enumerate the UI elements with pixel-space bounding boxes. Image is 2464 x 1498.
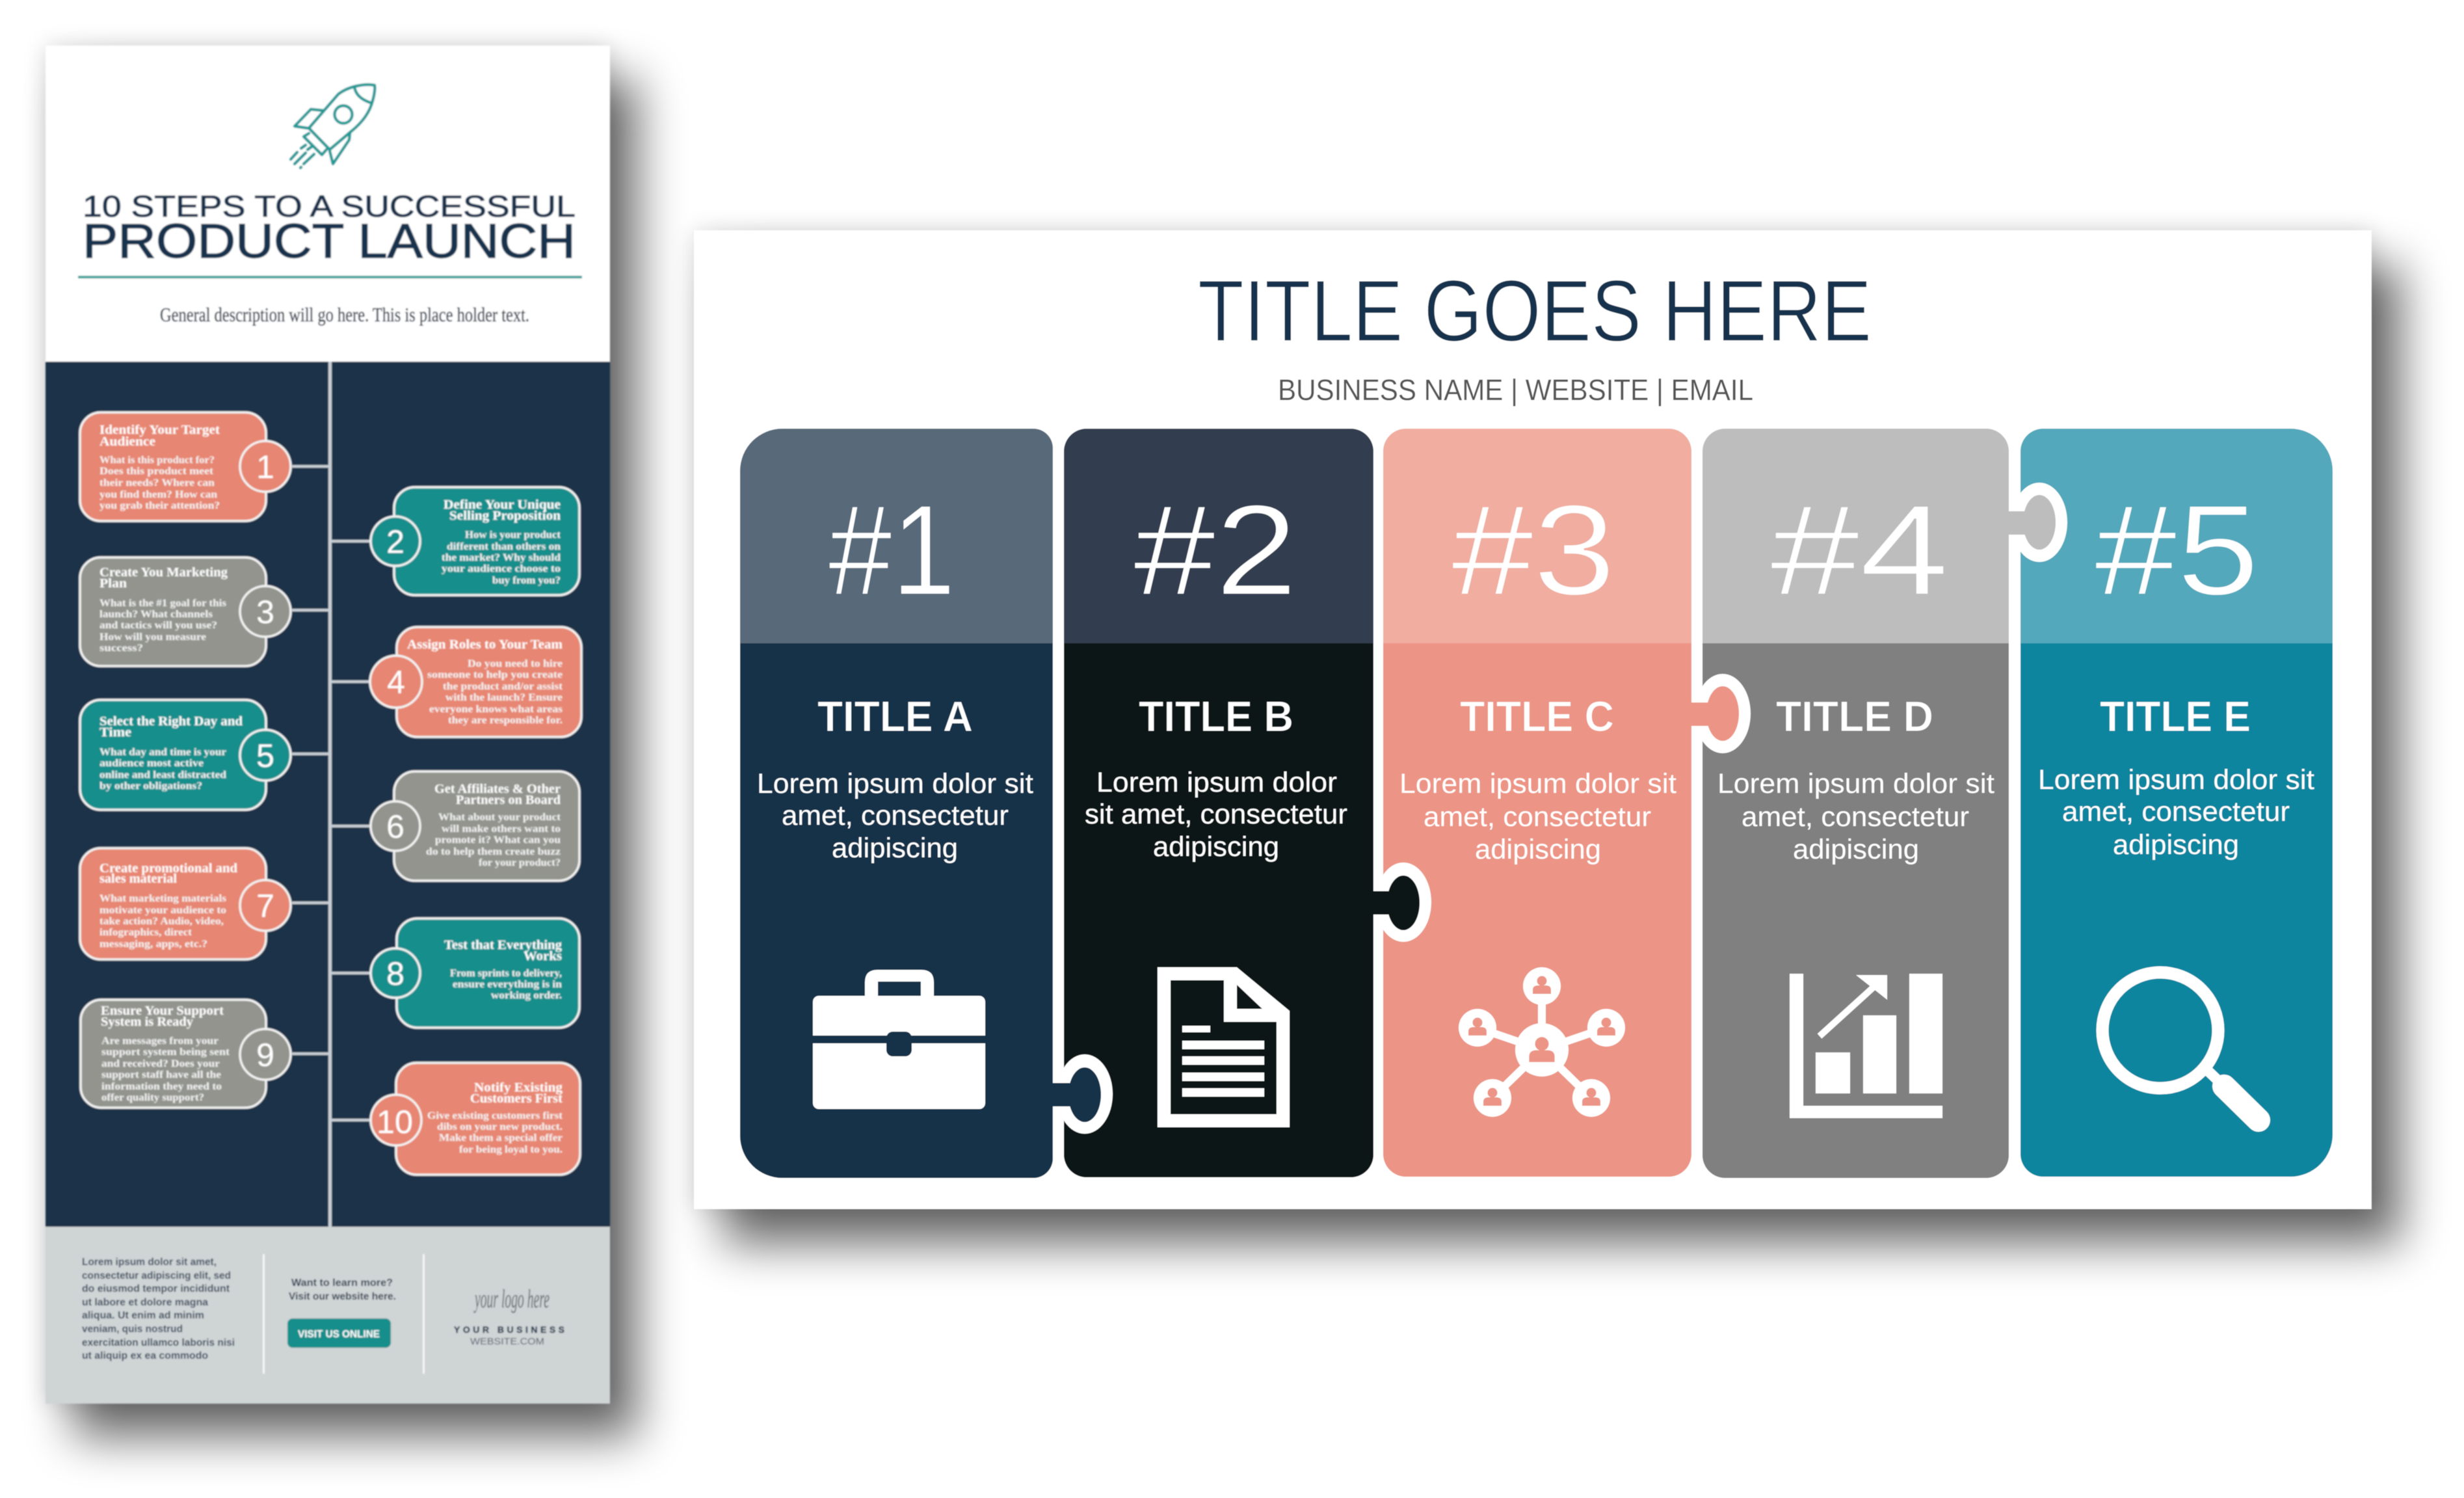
step 8 card: working order. — [491, 990, 562, 1001]
step 9 card: Are messages from your — [101, 1036, 219, 1047]
puzzle card 4: TITLE D — [1776, 692, 1933, 740]
puzzle card 4: adipiscing — [1793, 834, 1919, 865]
puzzle card 5: Lorem ipsum dolor sit — [2038, 764, 2314, 796]
step 6 card: 6 — [386, 809, 404, 845]
puzzle tab: card 3 into card 4 — [1691, 674, 1751, 753]
puzzle card 1: adipiscing — [832, 833, 958, 864]
step 5 card: What day and time is your — [99, 747, 226, 758]
step 9 card: support staff have all the — [101, 1069, 221, 1080]
step 7 card: sales material — [99, 872, 178, 886]
step 2 card — [371, 487, 579, 595]
step 10 card: 10 — [377, 1104, 413, 1140]
step 1 card: you find them? How can — [99, 489, 217, 500]
step 9 card: and received? Does your — [101, 1058, 220, 1069]
step 1 card: you grab their attention? — [99, 500, 220, 511]
footer lorem text: ut labore et dolore magna — [82, 1297, 208, 1308]
footer lorem text: ut aliquip ex ea commodo — [82, 1350, 208, 1361]
puzzle card 2: adipiscing — [1153, 831, 1279, 863]
step 9 card: 9 — [256, 1037, 274, 1073]
puzzle tab: card 2 into card 3 — [1373, 863, 1431, 942]
puzzle card 5: #5 — [2095, 478, 2259, 622]
step 5 card: Time — [99, 726, 131, 740]
step 10 card: Give existing customers first — [427, 1110, 563, 1121]
step 6 card: promote it? What can you — [435, 835, 561, 846]
title: 10 steps to a successful product launch — [83, 189, 576, 268]
puzzle card 3: TITLE C — [1460, 692, 1614, 740]
subtitle: BUSINESS NAME | WEBSITE | EMAIL — [1278, 373, 1753, 407]
step 6 card: Get Affiliates & Other — [434, 782, 561, 796]
footer lorem text: do eiusmod tempor incididunt — [82, 1283, 230, 1294]
step 8 card: Test that Everything — [444, 939, 562, 952]
footer lorem text: veniam, quis nostrud — [82, 1324, 183, 1335]
step 7 card: messaging, apps, etc.? — [99, 939, 207, 950]
button: visit us online — [287, 1318, 391, 1348]
panel: footer — [46, 1227, 610, 1404]
step 8 card: From sprints to delivery, — [450, 968, 562, 979]
step 2 card: buy from you? — [492, 575, 561, 586]
step 10 card: Make them a special offer — [439, 1132, 563, 1144]
puzzle card 3: Lorem ipsum dolor sit — [1399, 768, 1676, 799]
puzzle card 2: #2 — [1133, 478, 1297, 622]
icon: rocket — [291, 85, 375, 168]
step 2 card: Selling Proposition — [449, 509, 561, 523]
step 9 card: information they need to — [101, 1081, 222, 1092]
step 7 card: motivate your audience to — [99, 905, 226, 916]
step 10 card — [371, 1063, 580, 1175]
step 4 card: Assign Roles to Your Team — [407, 638, 563, 652]
puzzle card 3 — [1383, 429, 1691, 1177]
step 6 card: do to help them create buzz — [426, 846, 561, 857]
puzzle card 1: TITLE A — [817, 692, 973, 740]
step 4 card: someone to help you create — [427, 669, 563, 680]
puzzle card 2 — [1064, 429, 1373, 1177]
puzzle card 3: amet, consectetur — [1424, 801, 1651, 833]
panel: five step puzzle infographic — [694, 230, 2372, 1209]
puzzle card 4 — [1702, 429, 2009, 1178]
title: TITLE GOES HERE — [1198, 263, 1872, 360]
step 4 card: 4 — [387, 664, 405, 701]
step 7 card: Create promotional and — [99, 862, 237, 876]
step 10 card: Notify Existing — [474, 1081, 563, 1095]
step 2 card: your audience choose to — [442, 563, 561, 574]
business logo — [454, 1284, 564, 1347]
step 9 card — [81, 1000, 291, 1108]
step 1 card: What is this product for? — [99, 455, 215, 466]
step 8 card: ensure everything is in — [453, 979, 562, 990]
footer lorem text: aliqua. Ut enim ad minim — [82, 1310, 204, 1321]
step 6 card: What about your product — [438, 812, 561, 823]
puzzle card 1: Lorem ipsum dolor sit — [757, 768, 1033, 799]
puzzle card 4: #4 — [1770, 478, 1949, 622]
step 3 card: How will you measure — [99, 632, 206, 643]
step 5 card — [80, 700, 291, 810]
business logo: WEBSITE.COM — [470, 1336, 544, 1347]
step 7 card — [80, 848, 291, 959]
step 5 card: Select the Right Day and — [99, 715, 243, 729]
puzzle card 5: TITLE E — [2100, 692, 2251, 740]
panel: navy timeline background — [46, 362, 610, 1227]
step 4 card: everyone knows what areas — [429, 704, 563, 715]
step 1 card: Audience — [99, 435, 155, 449]
step 6 card: will make others want to — [442, 823, 561, 835]
step 4 card: Do you need to hire — [468, 658, 563, 669]
step 1 card: Identify Your Target — [99, 423, 220, 437]
puzzle tab: card 4 into card 5 — [2009, 483, 2067, 562]
step 1 card: 1 — [256, 449, 274, 485]
step 9 card: Ensure Your Support — [101, 1004, 224, 1018]
step 2 card: the market? Why should — [442, 552, 561, 563]
step 10 card: Customers First — [470, 1092, 563, 1106]
step 3 card: success? — [99, 643, 143, 654]
title underline — [78, 276, 582, 278]
step 3 card: 3 — [256, 594, 274, 630]
step 5 card: 5 — [256, 738, 274, 774]
step 3 card — [80, 557, 291, 666]
puzzle card 1: amet, consectetur — [782, 800, 1009, 831]
step 1 card: Does this product meet — [99, 466, 214, 477]
icon: growth bar chart — [1790, 974, 1942, 1118]
step 3 card: and tactics will you use? — [99, 620, 217, 631]
footer lorem text: consectetur adipiscing elit, sed — [82, 1270, 231, 1281]
puzzle card 3: #3 — [1451, 478, 1615, 622]
title: 10 steps to a successful product launch: PRODUCT LAUNCH — [83, 214, 576, 268]
timeline spine and connectors — [292, 362, 371, 1227]
step 9 card: support system being sent — [101, 1047, 230, 1058]
step 7 card: take action? Audio, video, — [99, 916, 224, 927]
footer lorem text: exercitation ullamco laboris nisi — [82, 1337, 235, 1348]
step 8 card: Works — [523, 950, 562, 963]
step 3 card: Plan — [99, 577, 127, 591]
panel shadow: puzzle infographic — [694, 230, 2401, 1244]
puzzle card 4: amet, consectetur — [1742, 801, 1969, 833]
step 1 card — [80, 412, 291, 521]
puzzle card 5: adipiscing — [2113, 829, 2239, 861]
step 4 card: the product and/or assist — [443, 681, 563, 692]
call to action text — [289, 1277, 396, 1302]
puzzle card 2: Lorem ipsum dolor — [1096, 767, 1337, 798]
step 7 card: infographics, direct — [99, 927, 192, 938]
puzzle card 5 — [2020, 429, 2333, 1177]
step 10 card: for being loyal to you. — [459, 1144, 563, 1155]
title: 10 steps to a successful product launch: 10 STEPS TO A SUCCESSFUL — [83, 189, 576, 223]
step 3 card: launch? What channels — [99, 609, 213, 620]
puzzle card 5: amet, consectetur — [2062, 796, 2290, 827]
puzzle card 2: TITLE B — [1139, 692, 1293, 740]
step 2 card: How is your product — [465, 529, 561, 541]
puzzle card 4: Lorem ipsum dolor sit — [1717, 768, 1994, 799]
step 2 card: different than others on — [447, 541, 561, 552]
step 7 card: What marketing materials — [99, 893, 226, 904]
step 5 card: by other obligations? — [99, 781, 202, 792]
step 4 card: they are responsible for. — [448, 715, 563, 726]
step 4 card: with the launch? Ensure — [445, 692, 563, 703]
step 5 card: audience most active — [99, 758, 204, 769]
step 5 card: online and least distracted — [99, 769, 226, 781]
panel: 10 steps product launch infographic — [46, 46, 610, 1404]
step 3 card: What is the #1 goal for this — [99, 598, 226, 609]
business logo: your logo here — [473, 1284, 550, 1313]
step 4 card — [370, 627, 581, 737]
step 10 card: dibs on your new product. — [437, 1121, 563, 1132]
panel shadow: product launch infographic — [46, 46, 637, 1438]
call to action text: Want to learn more? — [291, 1277, 393, 1289]
puzzle card 1 — [740, 429, 1053, 1178]
business logo: YOUR BUSINESS — [454, 1324, 564, 1335]
step 6 card — [371, 771, 579, 881]
step 6 card: Partners on Board — [456, 794, 561, 807]
step 2 card: 2 — [386, 524, 404, 560]
step 6 card: for your product? — [479, 857, 561, 868]
step 9 card: System is Ready — [101, 1015, 193, 1029]
button: visit us online: VISIT US ONLINE — [298, 1329, 380, 1340]
icon: people network — [1459, 967, 1625, 1117]
icon: document — [1164, 967, 1290, 1121]
footer lorem text: Lorem ipsum dolor sit amet, — [82, 1257, 217, 1268]
step 1 card: their needs? Where can — [99, 477, 215, 488]
puzzle tab: card 1 into card 2 — [1053, 1054, 1113, 1134]
step 9 card: offer quality support? — [101, 1092, 204, 1103]
icon: briefcase — [813, 970, 985, 1109]
step 8 card: 8 — [386, 956, 404, 992]
description text: General description will go here. This is place holder text. — [160, 303, 529, 326]
step 2 card: Define Your Unique — [444, 498, 561, 512]
puzzle card 1: #1 — [828, 478, 955, 622]
step 3 card: Create You Marketing — [99, 566, 228, 580]
step 8 card — [371, 918, 579, 1028]
footer lorem text — [82, 1257, 235, 1361]
puzzle card 3: adipiscing — [1475, 834, 1601, 865]
call to action text: Visit our website here. — [289, 1291, 396, 1302]
step 7 card: 7 — [256, 888, 274, 924]
icon: magnifying glass — [2102, 972, 2259, 1120]
puzzle card 2: sit amet, consectetur — [1085, 799, 1347, 830]
